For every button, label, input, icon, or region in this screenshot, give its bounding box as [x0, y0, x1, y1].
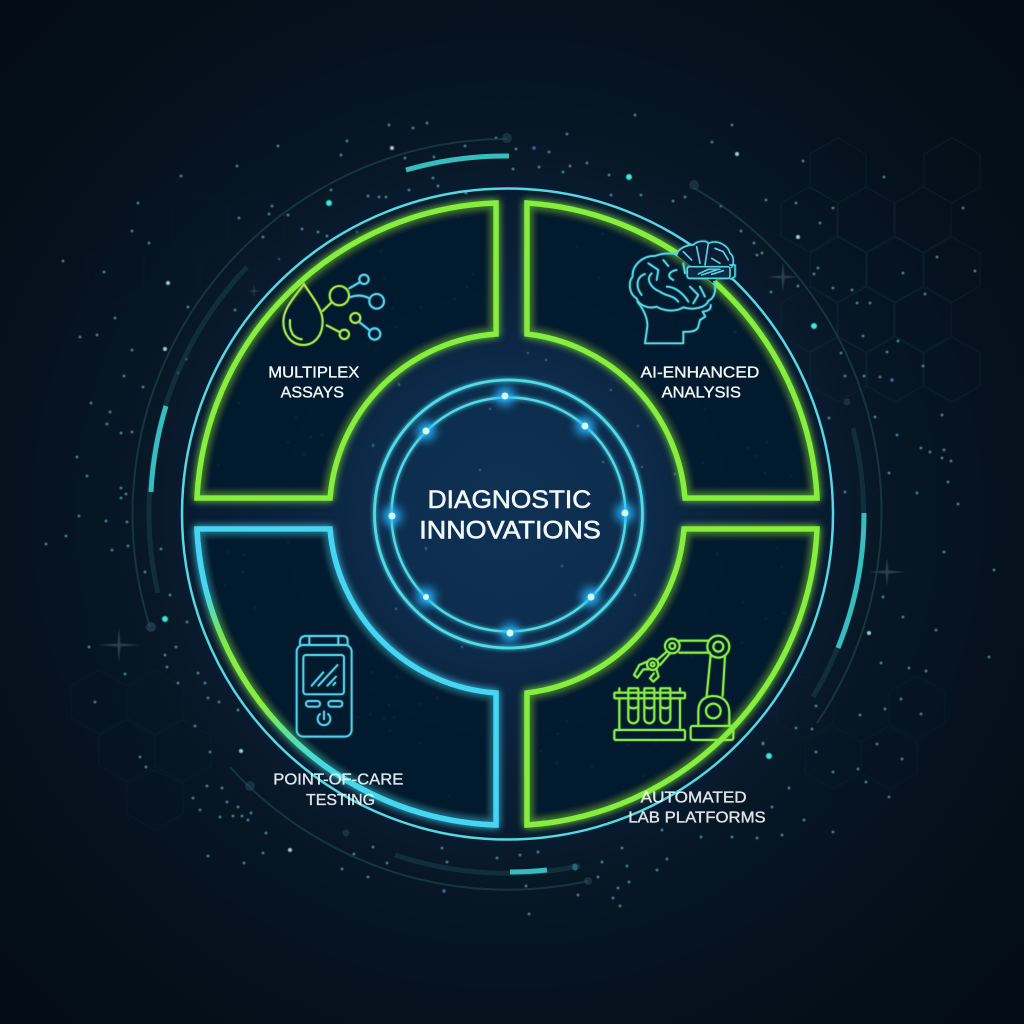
central hub rings — [374, 380, 642, 648]
label: point-of-care testing: TESTING — [306, 792, 375, 809]
orbit arcs: dim track — [149, 267, 864, 873]
hexagon pattern — [71, 138, 980, 830]
panel: automated lab platforms segment — [527, 529, 817, 825]
label: point-of-care testing — [273, 771, 403, 809]
title: diagnostic innovations: DIAGNOSTIC — [428, 486, 591, 514]
orbit arc nodes — [146, 133, 850, 885]
label: AI-enhanced analysis: AI-ENHANCED — [641, 365, 759, 382]
label: point-of-care testing: POINT-OF-CARE — [273, 771, 403, 788]
hub glowing nodes — [383, 387, 634, 642]
orbit arcs: thin outer ring — [133, 139, 881, 890]
outer cyan ring — [182, 188, 833, 840]
icon: robot arm with test tubes — [614, 636, 733, 740]
label: multiplex assays: MULTIPLEX — [268, 365, 360, 382]
icon: brain and head with visor — [630, 240, 736, 343]
panel: point-of-care testing segment — [197, 529, 496, 825]
panel: AI-enhanced analysis segment — [527, 203, 817, 498]
label: AI-enhanced analysis — [641, 365, 759, 401]
label: multiplex assays — [268, 365, 360, 401]
title: diagnostic innovations: INNOVATIONS — [419, 516, 601, 544]
label: automated lab platforms: LAB PLATFORMS — [628, 809, 766, 826]
label: AI-enhanced analysis: ANALYSIS — [662, 384, 741, 401]
label: automated lab platforms: AUTOMATED — [641, 790, 747, 807]
panel: multiplex assays segment — [197, 203, 496, 498]
label: multiplex assays: ASSAYS — [281, 384, 344, 401]
orbit arcs: bright accents — [151, 156, 864, 872]
title: diagnostic innovations — [419, 486, 601, 544]
label: automated lab platforms — [628, 790, 766, 826]
icon: handheld point-of-care device — [297, 636, 352, 737]
star field — [46, 115, 994, 914]
sparkle stars — [98, 262, 906, 663]
icon: droplet with molecular network — [283, 275, 384, 345]
